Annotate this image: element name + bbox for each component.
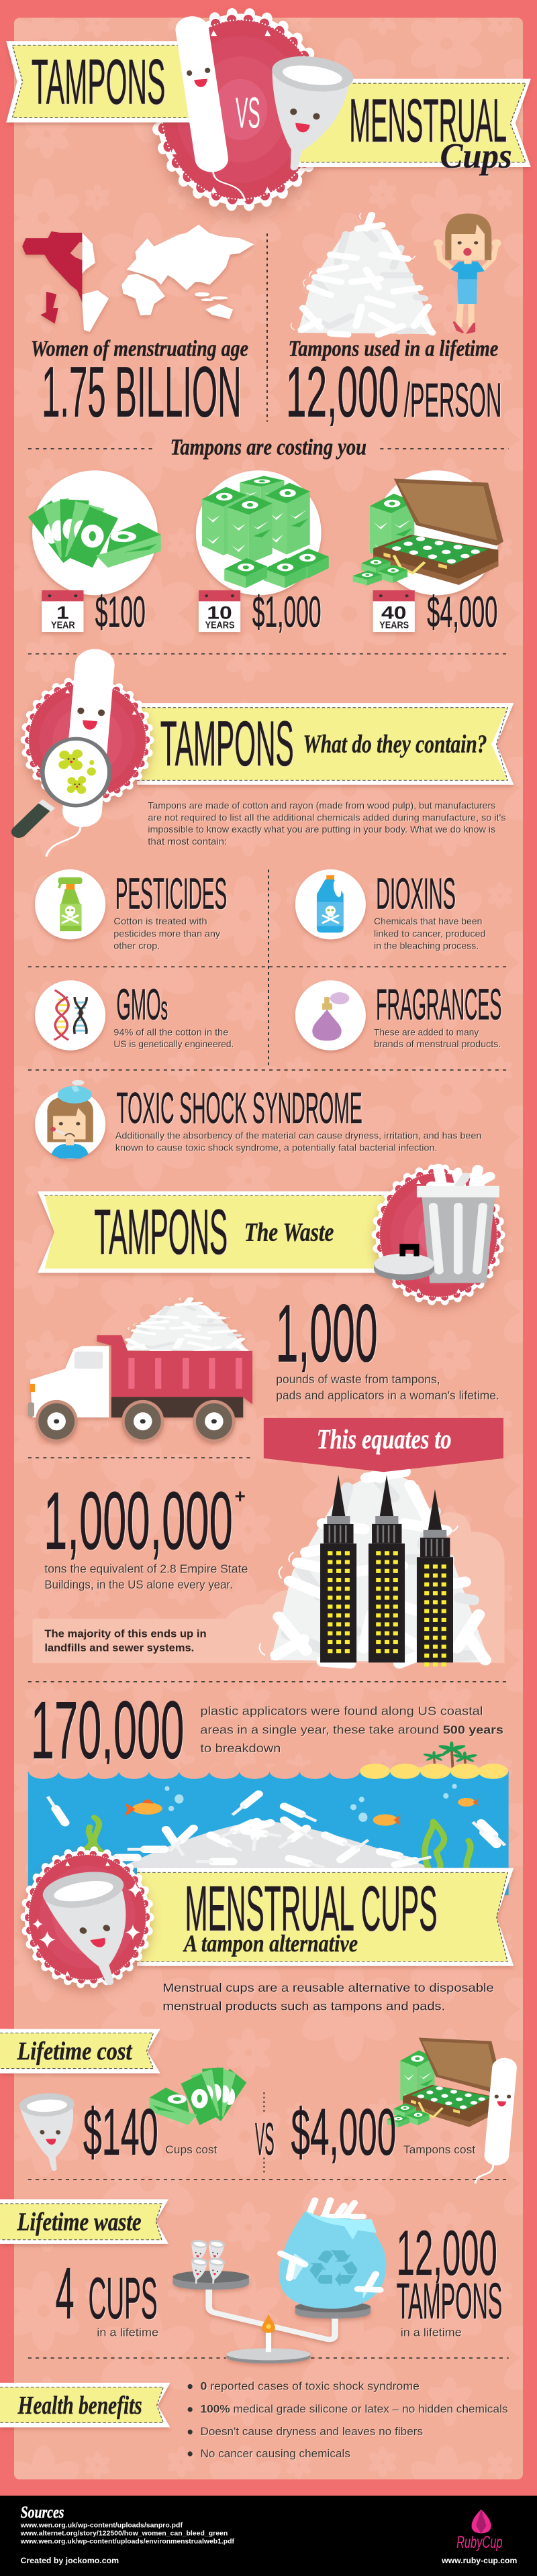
subheading: the waste: The Waste [244, 1218, 334, 1246]
text: tons equivalent: tons the equivalent of 2.8 Empire State [44, 1562, 248, 1576]
label: this equates to: This equates to [317, 1424, 451, 1454]
text: pesticides [113, 916, 220, 951]
text: cups intro [162, 1982, 494, 2013]
calendar: 40 years: 40 [381, 603, 406, 623]
section: hero and key stats: TAMPONS [32, 46, 165, 117]
text: pounds of waste: pounds of waste from tampons, [276, 1373, 440, 1386]
circle: 10 years [196, 470, 322, 595]
icon: perfume [295, 980, 366, 1051]
text: tons equivalent: Buildings, in the US alone every year. [44, 1578, 233, 1592]
icon: bleach bottle [295, 869, 366, 939]
section: cost and tampon contents: $100 [95, 588, 146, 637]
tampon with magnifier [19, 665, 109, 857]
paragraph: contents intro: that most contain: [148, 837, 227, 847]
section: waste, benefits and footer: 4 [56, 2253, 75, 2334]
circle: 40 years [374, 470, 499, 595]
icon: briefcase of cash [353, 478, 503, 586]
label: cups cost: Cups cost [165, 2143, 217, 2156]
section: ingredients: TAMPONS [94, 1196, 228, 1267]
stat label: women: Women of menstruating age [31, 336, 248, 362]
calendar: 1 year [42, 590, 83, 632]
text: plastic applicators: areas in a single year, these take around 500 years [200, 1723, 503, 1737]
sources list: www.alternet.org/story/122500/how_women_can_bleed_green [20, 2530, 228, 2537]
island [363, 1741, 501, 1778]
list: health benefits: Doesn't cause dryness and leaves no fibers [200, 2425, 423, 2438]
tampon mascot [475, 2068, 511, 2184]
label: lifetime cost: Lifetime cost [17, 2038, 132, 2065]
banner: the waste [38, 1191, 394, 1273]
icon: recycling bag [279, 2200, 387, 2309]
text: dioxins: in the bleaching process. [374, 941, 479, 951]
website: www.ruby-cup.com [441, 2557, 517, 2565]
title: cups script: Cups [440, 136, 512, 175]
banner: health benefits [0, 2383, 170, 2427]
cup mascot [268, 52, 357, 170]
sources list: www.wen.org.uk/wp-content/uploads/sanpro.pdf [20, 2522, 183, 2529]
doily badge [156, 14, 325, 205]
icon: trash can [374, 1168, 499, 1283]
tampon pile [291, 213, 435, 335]
label: health benefits: Health benefits [17, 2392, 142, 2420]
section: ocean and menstrual cups: $4,000 [291, 2096, 396, 2169]
text: fragrances: These are added to many [374, 1028, 479, 1038]
text: dioxins: linked to cancer, produced [374, 929, 485, 939]
cup mascot with sparkles [32, 1856, 169, 1992]
section: the waste [28, 1289, 509, 1682]
section: cost and tampon contents [19, 435, 514, 857]
calendar: 10 years [199, 590, 240, 632]
section: ocean and menstrual cups: $140 [83, 2096, 158, 2169]
banner: lifetime cost [0, 2029, 160, 2074]
text: fragrances [374, 1028, 501, 1050]
calendar: 1 year: 1 [56, 603, 69, 623]
shocked woman [434, 213, 501, 333]
balance scale [173, 2271, 371, 2363]
text: gmos: 94% of all the cotton in the [113, 1028, 229, 1038]
calendar: 10 years: 10 [207, 603, 232, 623]
doily badge [25, 1850, 150, 1984]
text: plastic applicators: to breakdown [200, 1742, 281, 1755]
section: ingredients [28, 869, 509, 1301]
icon: small cup [13, 2084, 95, 2174]
banner: menstrual cups [298, 79, 531, 167]
banner: lifetime waste [0, 2199, 168, 2244]
calendar: 40 years: YEARS [379, 619, 409, 631]
text: gmos [113, 1028, 234, 1050]
text: toxic shock: known to cause toxic shock syndrome, a potentially fatal bacterial infection. [115, 1143, 438, 1153]
callout: landfills [44, 1627, 207, 1654]
icon: sick woman [35, 1080, 105, 1159]
label: tampons cost: Tampons cost [403, 2143, 475, 2156]
text: dioxins: Chemicals that have been [374, 916, 482, 926]
world map [22, 225, 254, 332]
text: plastic applicators [200, 1705, 503, 1755]
icon: dump truck [28, 1298, 252, 1443]
callout: landfills: The majority of this ends up in [44, 1627, 207, 1640]
section: ingredients: GMOs [116, 979, 168, 1029]
heading: tampons are costing you: Tampons are costing you [170, 435, 367, 460]
doily badge [25, 679, 150, 802]
icon: spray bottle [35, 869, 105, 939]
sources list: www.wen.org.uk/wp-content/uploads/environmenstrualweb1.pdf [20, 2538, 234, 2545]
section: the waste: 1,000 [276, 1289, 378, 1379]
text: fragrances: brands of menstrual products. [374, 1040, 501, 1050]
label: in a lifetime: in a lifetime [97, 2326, 158, 2339]
subheading: a tampon alternative: A tampon alternative [183, 1930, 358, 1957]
text: pesticides: Cotton is treated with [113, 916, 207, 926]
plus mark: + [234, 1486, 246, 1507]
ocean scene [28, 1741, 509, 1895]
section: waste, benefits and footer [0, 2180, 537, 2576]
tampon mascot [187, 30, 245, 201]
label: lifetime waste: Lifetime waste [17, 2208, 142, 2236]
section: hero and key stats [6, 14, 531, 432]
section: hero and key stats: VS [236, 88, 260, 138]
banner: menstrual cups [137, 1868, 514, 1966]
text: tons equivalent [44, 1562, 248, 1592]
credit: Created by jockomo.com [21, 2557, 119, 2565]
calendar: 40 years [373, 590, 415, 632]
doily badge [376, 1169, 501, 1301]
icon: pile with skyscrapers [260, 1450, 490, 1666]
circle: 1 year [32, 470, 158, 595]
sources list [20, 2522, 234, 2545]
icon: dna [35, 980, 105, 1051]
list: health benefits: 0 reported cases of toxic shock syndrome [200, 2379, 420, 2392]
section: the waste: 1,000,000 [44, 1476, 233, 1566]
section: waste, benefits and footer: CUPS [89, 2265, 158, 2330]
banner: tampons [6, 41, 192, 122]
text: pesticides: pesticides more than any [113, 929, 220, 939]
icon: recycling bag: ♻ [304, 2239, 362, 2300]
section: cost and tampon contents: $1,000 [252, 588, 322, 637]
text: pesticides: other crop. [113, 941, 160, 951]
divider and vs [255, 2092, 275, 2174]
text: plastic applicators: plastic applicators were found along US coastal [200, 1705, 483, 1718]
banner: this equates to [264, 1418, 503, 1472]
text: dioxins [374, 916, 485, 951]
label: in a lifetime: in a lifetime [401, 2326, 462, 2339]
list: health benefits [188, 2379, 508, 2459]
banner: what do they contain [137, 703, 514, 785]
icon: briefcase of cash [387, 2038, 503, 2127]
text: toxic shock [115, 1131, 481, 1153]
section: ocean and menstrual cups [0, 1686, 514, 2184]
callout backdrop [32, 1512, 505, 1663]
icon: cash stacks [202, 476, 329, 588]
ruby cup logo [456, 2510, 502, 2552]
icon: cash fan [150, 2066, 246, 2125]
section: ocean and menstrual cups: 170,000 [31, 1686, 184, 1776]
text: cups intro: Menstrual cups are a reusable alternative to disposable [162, 1982, 494, 1994]
calendar: 1 year: YEAR [51, 619, 75, 631]
section: ingredients: PESTICIDES [115, 869, 227, 918]
text: pounds of waste [276, 1373, 499, 1403]
footer bar [0, 2496, 537, 2576]
vertical divider [266, 233, 268, 422]
icon: four cups [191, 2239, 226, 2284]
callout: landfills: landfills and sewer systems. [44, 1642, 194, 1654]
text: gmos: US is genetically engineered. [113, 1040, 234, 1050]
calendar: 10 years: YEARS [205, 619, 234, 631]
paragraph: contents intro [148, 801, 506, 847]
icon: cash fan [28, 498, 161, 568]
sources heading: Sources [21, 2503, 64, 2522]
list: health benefits: No cancer causing chemicals [200, 2447, 350, 2459]
text: cups intro: menstrual products such as tampons and pads. [162, 2000, 445, 2013]
section: ocean and menstrual cups: VS [255, 2114, 275, 2165]
